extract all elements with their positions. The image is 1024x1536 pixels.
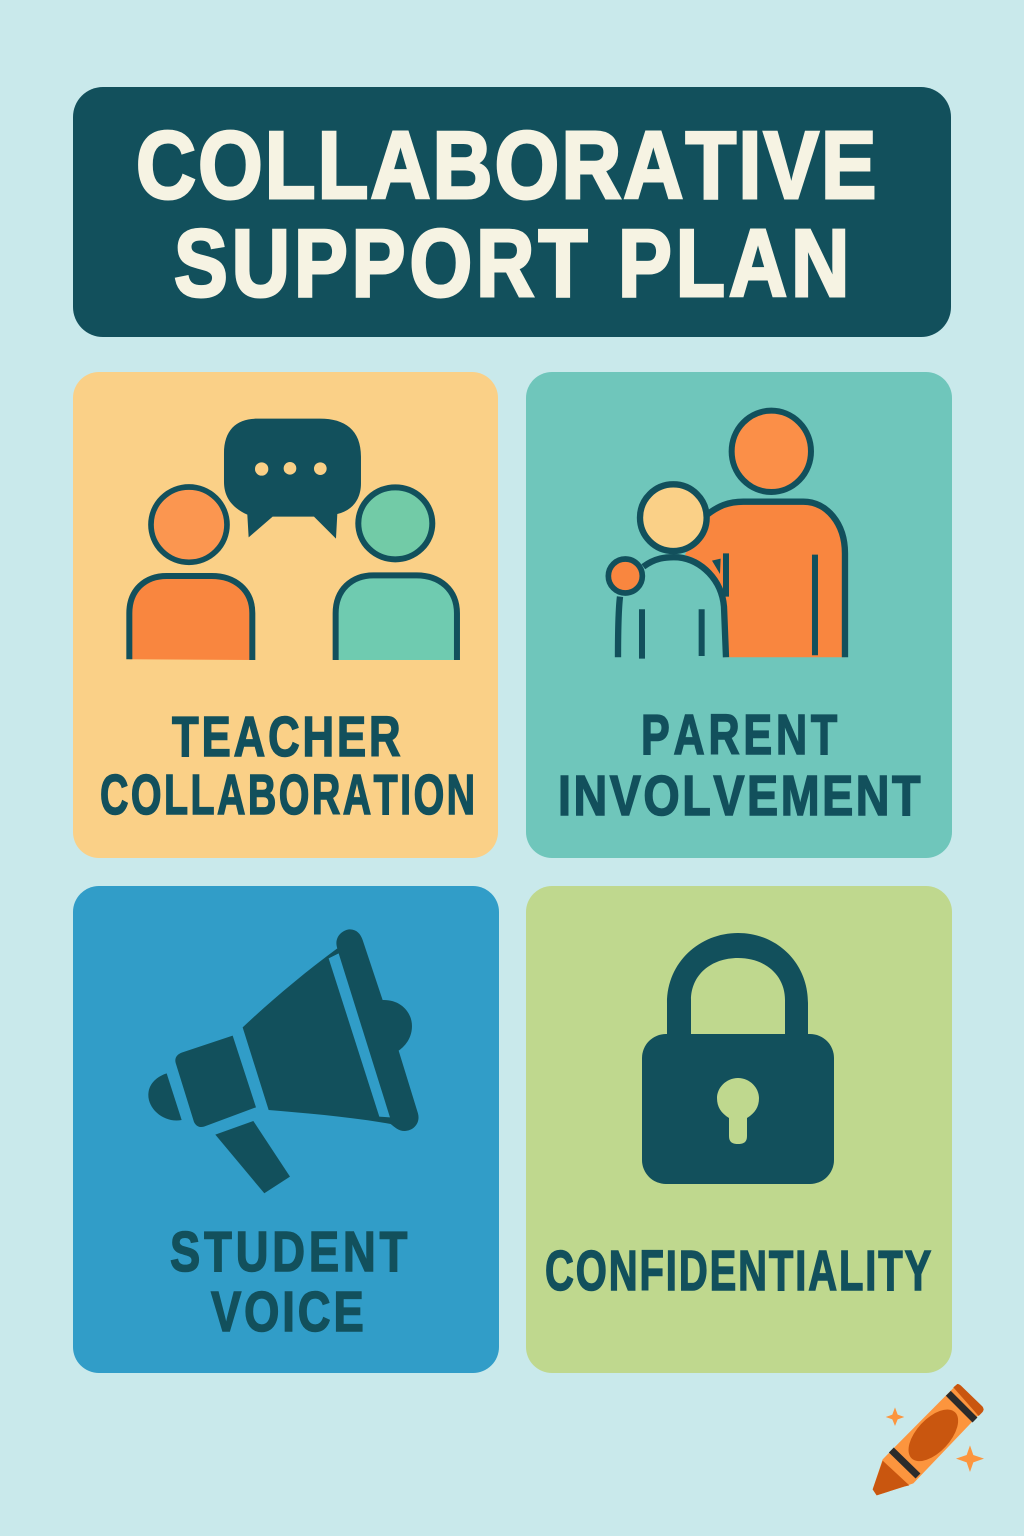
label: teacher collaboration (100, 704, 475, 827)
title banner: SUPPORT PLAN (174, 209, 849, 317)
icon: two teachers with speech bubble (129, 419, 457, 660)
panel: confidentiality (526, 886, 952, 1373)
label: parent involvement: PARENT (641, 702, 837, 766)
icon: parent with child (608, 411, 845, 659)
label: teacher collaboration: TEACHER (172, 704, 401, 768)
label: student voice: STUDENT (170, 1219, 407, 1283)
label: student voice: VOICE (211, 1279, 364, 1343)
label: teacher collaboration: COLLABORATION (100, 764, 475, 827)
label: parent involvement: INVOLVEMENT (558, 765, 921, 828)
label: parent involvement (558, 702, 921, 828)
label: student voice (170, 1219, 407, 1343)
panel: student voice (73, 886, 499, 1373)
panel: teacher collaboration (73, 372, 498, 858)
title banner (73, 87, 951, 337)
icon: padlock (642, 933, 834, 1184)
icon: crayon with sparkles (873, 1384, 984, 1495)
title banner: COLLABORATIVE (136, 112, 876, 219)
label: confidentiality: CONFIDENTIALITY (545, 1239, 931, 1303)
panel: parent involvement (526, 372, 952, 858)
icon: megaphone (148, 929, 419, 1193)
